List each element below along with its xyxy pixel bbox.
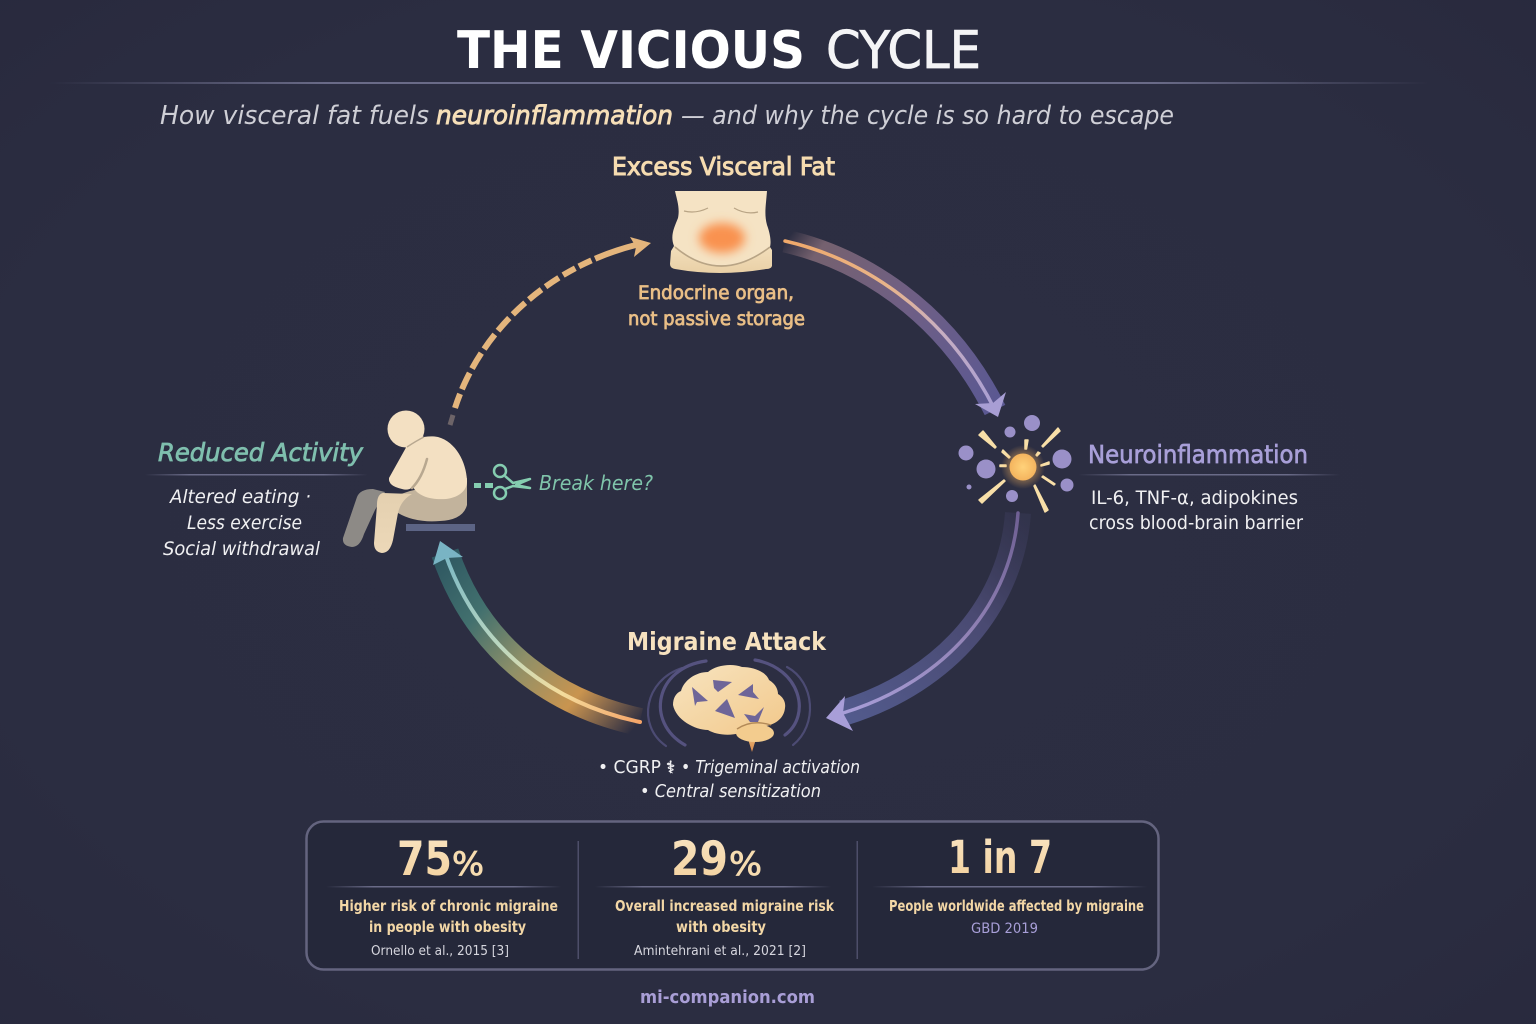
footer: website: mi-companion.com [640,987,815,1008]
stat: 1 in 7: GBD 2019 [971,921,1038,937]
stat: 75 percent: Higher risk of chronic migraine [339,897,558,915]
node: neuroinflammation: cross blood-brain barrier [1089,512,1303,534]
node: migraine attack [598,627,860,802]
stat: 29 percent: with obesity [676,918,766,936]
arrow: dashed feedback to visceral fat [450,237,651,425]
arrow: fat to neuroinflammation [785,241,1006,417]
callout: break here with scissors: Break here? [539,471,653,495]
stat: 29 percent: 29 [671,832,728,887]
arrow: migraine to reduced activity [433,541,640,722]
node: neuroinflammation [1078,440,1340,534]
stat: 75 percent: Ornello et al., 2015 [3] [371,944,509,959]
callout: break here with scissors [474,465,653,499]
stat: 75 percent: in people with obesity [369,918,526,936]
stat: 29 percent: Overall increased migraine risk [615,897,835,915]
icon: brain with pulse rings [648,660,810,752]
node: migraine attack: • Central sensitization [640,781,821,802]
panel: statistics [306,822,1158,970]
subtitle: How visceral fat fuels [160,101,429,131]
arrow: neuroinflammation to migraine [826,513,1018,731]
node: reduced activity: Less exercise [187,512,302,534]
node: reduced activity: Reduced Activity [158,438,364,467]
stat: 75 percent: 75 [397,832,452,887]
node: excess visceral fat: not passive storage [628,308,805,330]
node: excess visceral fat: Excess Visceral Fat [612,152,835,181]
node: migraine attack: • Trigeminal activation [681,757,860,778]
node: excess visceral fat: Endocrine organ, [638,282,794,304]
subtitle: — and why the cycle is so hard to escape [681,101,1174,131]
node: excess visceral fat [612,152,835,330]
stat: 1 in 7 [872,831,1147,937]
node: reduced activity: Social withdrawal [163,538,321,560]
icon: inflammation burst [958,415,1074,512]
stat: 75 percent: % [452,845,484,883]
icon: hunched seated person [343,410,475,553]
stat: 75 percent [326,832,561,959]
stat: 29 percent: % [729,845,762,883]
title: THE VICIOUS [457,21,805,81]
stat: 1 in 7: 1 in 7 [948,831,1052,884]
node: reduced activity [145,438,368,560]
node: migraine attack: ⚕ [666,758,675,778]
icon: abdomen [670,191,772,273]
stat: 1 in 7: People worldwide affected by migraine [889,897,1144,915]
stat: 29 percent: Amintehrani et al., 2021 [2] [634,944,806,959]
node: neuroinflammation: IL-6, TNF-α, adipokines [1091,487,1298,509]
subtitle [160,101,1174,131]
title: CYCLE [826,21,981,81]
subtitle: neuroinflammation [436,101,673,131]
node: reduced activity: Altered eating · [168,486,311,508]
node: migraine attack: Migraine Attack [627,627,827,656]
node: neuroinflammation: Neuroinflammation [1088,440,1308,469]
stat: 29 percent [595,832,835,959]
icon: scissors [494,465,530,499]
node: migraine attack: • CGRP [598,757,661,778]
